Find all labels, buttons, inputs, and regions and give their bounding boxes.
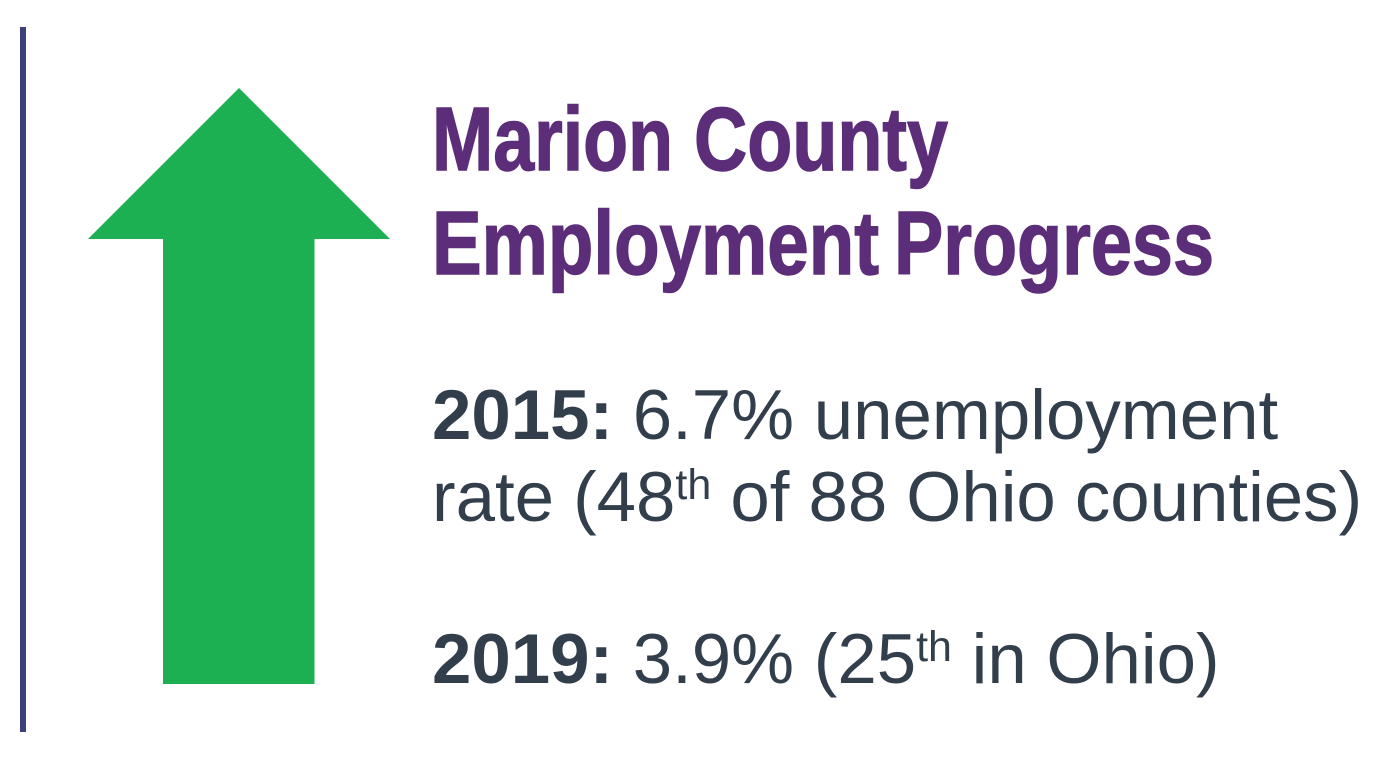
title: Employment [432, 194, 879, 294]
title [432, 90, 1214, 294]
text block: 2019 statistic: 2019: 3.9% (25 [432, 620, 916, 699]
icon: green up arrow [88, 88, 390, 684]
text block: 2019 statistic: th [916, 623, 952, 671]
title: Marion [432, 90, 673, 190]
title: Progress [894, 194, 1214, 294]
title: County [694, 90, 948, 190]
text block: 2015 statistic: rate (48 [432, 458, 675, 537]
text block: 2019 statistic: in Ohio) [952, 620, 1220, 699]
vertical accent bar [20, 27, 26, 732]
text block: 2019 statistic [432, 620, 1220, 699]
text block: 2015 statistic [432, 376, 1362, 537]
text block: 2015 statistic: of 88 Ohio counties) [711, 458, 1362, 537]
text block: 2015 statistic: th [675, 461, 711, 509]
text block: 2015 statistic: 2015: 6.7% unemployment [432, 376, 1278, 455]
